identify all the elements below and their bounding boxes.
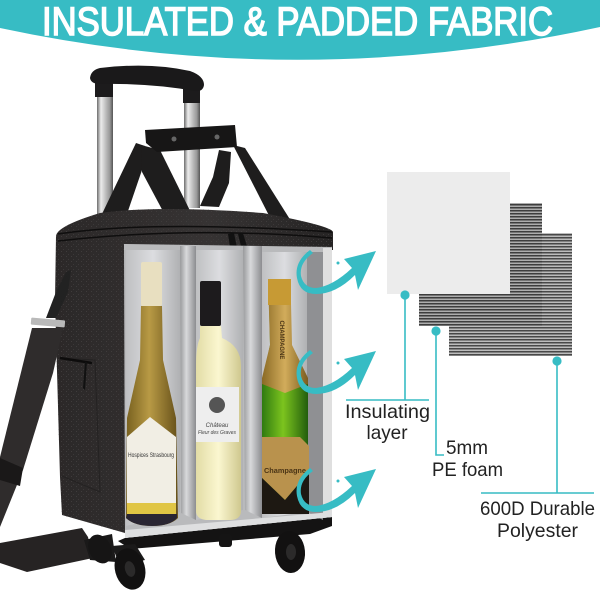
callout: insulating layer: Insulating	[345, 401, 430, 423]
swatch: 600D polyester	[449, 233, 572, 356]
callout: PE foam: 5mm	[446, 437, 488, 459]
wine trolley bag	[0, 66, 333, 593]
callout: PE foam	[431, 326, 503, 481]
callout: PE foam: PE foam	[432, 459, 503, 481]
title banner	[0, 0, 600, 60]
bottle: white bordeaux	[196, 281, 241, 520]
bottle: white riesling	[126, 262, 178, 526]
callout: insulating layer: layer	[366, 422, 408, 444]
bottle: champagne	[262, 279, 309, 514]
bottle: champagne: CHAMPAGNE	[278, 321, 284, 359]
arrow: heat reflected, bottom	[297, 468, 376, 512]
bottle: white bordeaux: Château	[206, 423, 229, 429]
wheels and base	[84, 517, 332, 593]
bottle: white bordeaux: Fleur des Graves	[198, 430, 236, 436]
insulated compartments	[124, 244, 332, 538]
fabric layer swatches	[387, 172, 572, 356]
side pocket	[58, 358, 100, 492]
telescopic handle	[90, 66, 204, 214]
arrow: heat reflected, top	[297, 250, 376, 294]
carry straps	[102, 125, 308, 248]
callout: polyester: Polyester	[497, 520, 578, 542]
bag body	[55, 209, 333, 540]
swatch: PE foam	[419, 203, 542, 326]
bottle: champagne: Champagne	[264, 468, 306, 475]
shoulder strap	[0, 270, 93, 572]
arrow: heat reflected, middle	[297, 350, 376, 394]
callout: polyester: 600D Durable	[480, 498, 595, 520]
bottle: white riesling: Hospices Strasbourg	[128, 452, 174, 459]
callout: insulating layer	[345, 290, 430, 444]
swatch: insulating layer	[387, 172, 510, 294]
callout: polyester	[480, 356, 595, 542]
